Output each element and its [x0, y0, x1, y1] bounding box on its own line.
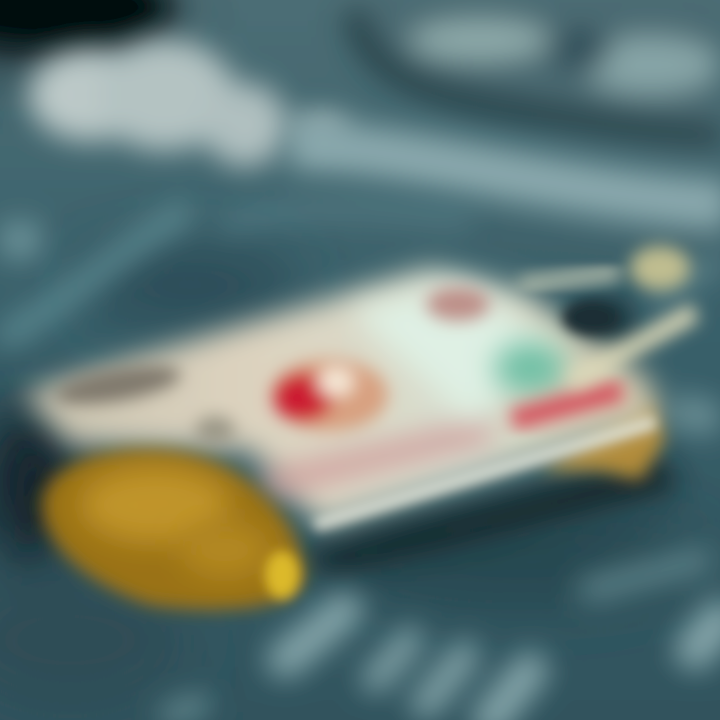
- teal-green patch: [494, 342, 566, 394]
- pink motif top: [426, 287, 490, 321]
- pink stripe: [265, 430, 490, 485]
- cloud: [28, 39, 348, 167]
- white lower edge: [315, 422, 655, 525]
- red stripe right: [512, 390, 622, 420]
- card body: [22, 268, 660, 525]
- gold coin: [42, 449, 305, 610]
- left streaks: [0, 209, 720, 420]
- gold card edge: [540, 400, 665, 480]
- paper clip: [520, 272, 620, 285]
- pale pen streak: [570, 312, 695, 382]
- top-left black corner: [0, 0, 170, 50]
- bottom light marks: [170, 560, 720, 720]
- top right swirl: [350, 0, 720, 160]
- text smudge on card: [52, 358, 184, 412]
- light band: [290, 145, 720, 250]
- red circle: [272, 359, 388, 431]
- card: [22, 246, 695, 525]
- card shadow: [20, 295, 680, 575]
- pale green panel: [350, 285, 560, 420]
